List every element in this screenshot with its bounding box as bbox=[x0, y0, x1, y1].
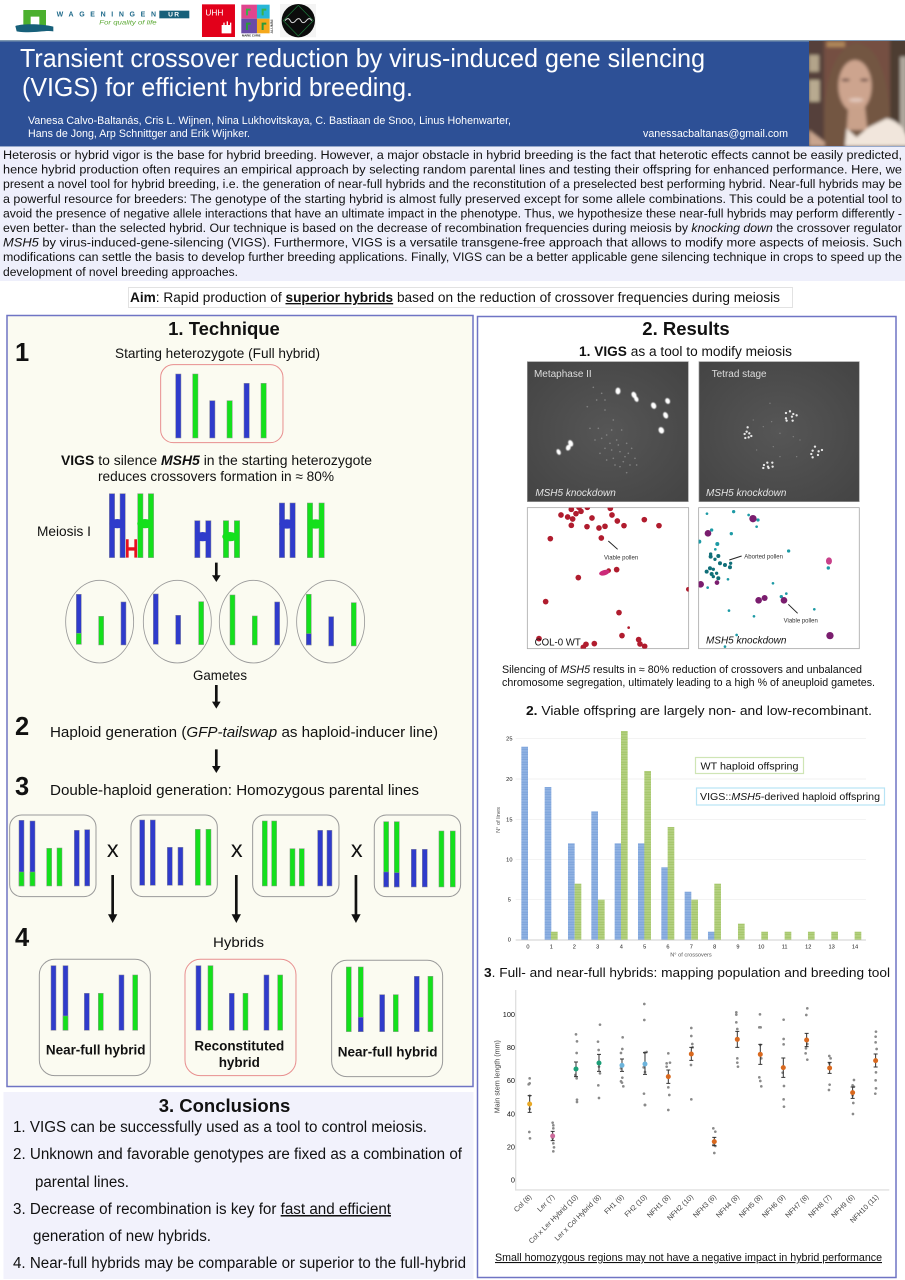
cross symbols: x bbox=[107, 836, 119, 862]
panel: conclusions bbox=[4, 1092, 474, 1279]
legend: WT haploid offspring: WT haploid offspring bbox=[700, 760, 799, 772]
abstract: even better- than the selected hybrid. Our technique is based on the decrease of recombination frequencies during meiosis by knocking down the crossover regulator bbox=[3, 221, 902, 235]
y axis labels: 60 bbox=[507, 1076, 515, 1085]
silencing caption: Silencing of MSH5 results in ≈ 80% reduction of crossovers and unbalanced bbox=[502, 664, 862, 676]
bar chart: crossovers: 1 bbox=[550, 944, 553, 950]
abstract: present a novel tool for hybrid breeding, i.e. the generation of near-full hybrids and the reconstitution of a preselected best performing hybrid. Near-full hybrids may be bbox=[3, 177, 902, 191]
bar chart: crossovers: 10 bbox=[506, 857, 512, 863]
bar chart: crossovers: N° of crossovers bbox=[670, 953, 712, 959]
logo: Marie Curie Alumni bbox=[241, 5, 274, 37]
logo: UHH: UHH bbox=[205, 7, 223, 17]
micrograph: MSH5 knockdown pollen bbox=[697, 508, 859, 649]
starting heterozygote label: Starting heterozygote (Full hybrid) bbox=[115, 346, 320, 361]
micrograph: COL-0 WT pollen: COL-0 WT bbox=[535, 637, 581, 648]
scatter chart: main stem length: Main stem length (mm) bbox=[493, 1040, 501, 1113]
conclusions list: generation of new hybrids. bbox=[33, 1228, 211, 1245]
VIGS description bbox=[61, 453, 372, 484]
title bbox=[20, 43, 705, 102]
y axis labels bbox=[503, 1010, 515, 1184]
homozygous parental lines bbox=[10, 815, 461, 897]
header banner bbox=[0, 37, 905, 150]
bar chart: crossovers bbox=[496, 731, 866, 959]
logo: Wageningen UR: WAGENINGEN bbox=[57, 12, 156, 19]
logo: Wageningen UR: For quality of life bbox=[99, 20, 157, 27]
bar chart: crossovers: 25 bbox=[506, 737, 512, 743]
x axis labels: FH2 (10) bbox=[623, 1193, 649, 1219]
bar chart: crossovers: 0 bbox=[508, 938, 511, 944]
x axis labels: Col (8) bbox=[513, 1193, 533, 1214]
logo: Marie Curie Alumni: ALUMNI bbox=[270, 20, 274, 33]
bar chart: crossovers: 6 bbox=[666, 944, 670, 950]
abstract: a powerful resource for breeders: The genotype of the starting hybrid is almost fully preserved except for some allele combinations. This could be a potential tool to bbox=[3, 192, 902, 206]
x axis labels: NFH7 (8) bbox=[784, 1193, 810, 1220]
bar chart: crossovers: 14 bbox=[852, 944, 858, 950]
logo: UHH bbox=[202, 4, 235, 37]
conclusions list: 4. Near-full hybrids may be comparable or superior to the full-hybrid bbox=[13, 1255, 466, 1272]
hybrid: near-full right bbox=[332, 960, 443, 1077]
x axis labels: Col x Ler Hybrid (10) bbox=[527, 1193, 580, 1245]
abstract: hence hybrid production often requires an empirical approach by selecting random parental lines and testing their offspring for enhanced performance. Here, we bbox=[3, 163, 902, 177]
bar chart: crossovers: 13 bbox=[828, 944, 835, 950]
logo: round emblem bbox=[280, 4, 316, 37]
y axis labels: 0 bbox=[511, 1175, 515, 1184]
micrograph: tetrad stage bbox=[699, 362, 859, 502]
micrograph: metaphase II: MSH5 knockdown bbox=[535, 488, 616, 499]
VIGS description: VIGS to silence MSH5 in the starting heterozygote bbox=[61, 453, 372, 468]
logo: Wageningen UR bbox=[15, 10, 189, 32]
abstract: MSH5 by virus-induced-gene-silencing (VIGS). Furthermore, VIGS is a versatile transgene-free approach that allows to modify more aspects of meiosis. Such bbox=[3, 236, 902, 250]
hybrid: near-full left bbox=[39, 959, 150, 1076]
panel: technique bbox=[7, 316, 473, 1086]
hybrid: near-full left: Near-full hybrid bbox=[46, 1043, 145, 1058]
subheading: mapping population: 3. Full- and near-full hybrids: mapping population and breeding tool bbox=[484, 965, 890, 980]
full hybrid chromosomes bbox=[161, 365, 283, 443]
legend: WT haploid offspring bbox=[696, 758, 804, 774]
bar chart: crossovers: 12 bbox=[805, 944, 811, 950]
arrow: meiosis to gametes bbox=[212, 563, 221, 582]
micrograph: metaphase II bbox=[527, 362, 688, 502]
conclusions list bbox=[13, 1119, 466, 1272]
double haploid text: Double-haploid generation: Homozygous parental lines bbox=[50, 782, 419, 799]
bar chart: crossovers: 20 bbox=[506, 777, 512, 783]
VIGS description: reduces crossovers formation in ≈ 80% bbox=[98, 469, 334, 484]
cross symbols bbox=[107, 836, 363, 862]
abstract bbox=[0, 147, 905, 281]
x axis labels: NFH2 (10) bbox=[666, 1193, 695, 1222]
silencing caption: chromosome segregation, ultimately leading to a high % of aneuploid gametes. bbox=[502, 677, 875, 689]
bar chart: crossovers: 5 bbox=[508, 898, 511, 904]
x axis labels: NFH10 (11) bbox=[849, 1193, 880, 1225]
step number 1: 1 bbox=[15, 339, 29, 367]
cross symbols: x bbox=[351, 836, 363, 862]
conclusions list: parental lines. bbox=[35, 1174, 129, 1191]
x axis labels: NFH5 (8) bbox=[738, 1193, 764, 1220]
authors: Hans de Jong, Arp Schnittger and Erik Wijnker. bbox=[28, 128, 250, 140]
conclusions list: 3. Decrease of recombination is key for fast and efficient bbox=[13, 1201, 392, 1218]
group means bbox=[527, 1037, 878, 1144]
logo: Marie Curie Alumni: MARIE CURIE bbox=[242, 33, 261, 37]
hybrid: reconstituted bbox=[185, 959, 296, 1076]
logo: Wageningen UR: UR bbox=[168, 12, 180, 19]
hybrid: near-full right: Near-full hybrid bbox=[338, 1044, 437, 1059]
micrograph: MSH5 knockdown pollen: Aborted pollen bbox=[744, 555, 783, 561]
x axis labels: NFH8 (7) bbox=[807, 1193, 833, 1220]
x axis labels: NFH9 (6) bbox=[830, 1193, 856, 1220]
conclusions list: 1. VIGS can be successfully used as a tool to control meiosis. bbox=[13, 1119, 427, 1136]
x axis labels: FH1 (9) bbox=[603, 1193, 626, 1216]
hybrid: reconstituted: Reconstituted bbox=[194, 1039, 284, 1054]
y axis labels: 100 bbox=[503, 1010, 515, 1019]
arrow: gametes to haploid bbox=[212, 685, 221, 709]
cross symbols: x bbox=[231, 836, 243, 862]
micrograph: MSH5 knockdown pollen: MSH5 knockdown bbox=[706, 635, 787, 646]
logos row bbox=[15, 4, 316, 37]
step number 2: 2 bbox=[15, 713, 29, 741]
raw data points bbox=[527, 1003, 878, 1154]
bar chart: crossovers: 11 bbox=[782, 944, 788, 950]
bar chart: crossovers: 7 bbox=[690, 944, 693, 950]
haploid generation text: Haploid generation (GFP-tailswap as haploid-inducer line) bbox=[50, 724, 438, 741]
bar chart: crossovers: 4 bbox=[620, 944, 623, 950]
abstract: avoid the presence of negative allele interactions that have an ultimate impact in the phenotype. Thus, we hypothesize these near-full hybrids may perform differently - bbox=[3, 206, 902, 220]
hybrids label: Hybrids bbox=[213, 935, 264, 950]
x axis labels bbox=[513, 1193, 880, 1245]
y axis labels: 40 bbox=[507, 1109, 515, 1118]
x axis labels: Ler (7) bbox=[536, 1193, 556, 1214]
bar chart: crossovers: 9 bbox=[736, 944, 740, 950]
bar chart: crossovers: 10 bbox=[758, 944, 764, 950]
arrow: haploid to double haploid bbox=[212, 749, 221, 773]
abstract: Heterosis or hybrid vigor is the base for hybrid breeding. However, a major obstacle in hybrid breeding is the fact that heterotic effects cannot be easily predicted, bbox=[3, 148, 902, 162]
bar chart: crossovers: 3 bbox=[596, 944, 599, 950]
bar chart: crossovers: 5 bbox=[643, 944, 646, 950]
legend: VIGS MSH5 offspring: VIGS::MSH5-derived haploid offspring bbox=[700, 791, 880, 803]
abstract: development of novel breeding approaches. bbox=[3, 265, 238, 279]
bar chart: crossovers: 15 bbox=[506, 817, 512, 823]
y axis labels: 20 bbox=[507, 1142, 515, 1151]
x axis labels: NFH1 (8) bbox=[646, 1193, 672, 1220]
subheading: VIGS tool: 1. VIGS as a tool to modify meiosis bbox=[579, 344, 792, 359]
y axis labels: 80 bbox=[507, 1043, 515, 1052]
micrograph: tetrad stage: MSH5 knockdown bbox=[706, 488, 787, 499]
chart takeaway: Small homozygous regions may not have a negative impact in hybrid performance bbox=[495, 1252, 882, 1264]
x axis labels: NFH3 (6) bbox=[692, 1193, 718, 1220]
meiosis label: Meiosis I bbox=[37, 524, 91, 539]
author photo bbox=[809, 41, 905, 146]
x axis labels: NFH4 (8) bbox=[715, 1193, 741, 1220]
bar chart: crossovers: 0 bbox=[526, 944, 530, 950]
title: Transient crossover reduction by virus-induced gene silencing bbox=[20, 43, 705, 73]
contact email: vanessacbaltanas@gmail.com bbox=[643, 128, 788, 140]
abstract: modifications can settle the basis to develop further breeding applications. Finally, VIGS can be a better applicable gene silencing technique in crops to speed up the bbox=[3, 250, 902, 264]
micrograph: COL-0 WT pollen: Viable pollen bbox=[604, 555, 638, 561]
error bars bbox=[528, 1031, 878, 1146]
aim box: Aim: Rapid production of superior hybrids based on the reduction of crossover frequencies during meiosis bbox=[130, 290, 780, 305]
scatter chart: main stem length bbox=[493, 990, 889, 1245]
title: (VIGS) for efficient hybrid breeding. bbox=[22, 72, 413, 102]
gamete cells bbox=[66, 580, 365, 663]
x axis labels: Ler x Col Hybrid (8) bbox=[553, 1193, 603, 1243]
bars: WT offspring bbox=[551, 731, 861, 940]
meiosis I chromosomes bbox=[109, 494, 324, 558]
micrograph: tetrad stage: Tetrad stage bbox=[712, 369, 767, 380]
panel: results bbox=[478, 316, 896, 1278]
silencing caption bbox=[502, 664, 875, 689]
legend: VIGS MSH5 offspring bbox=[696, 788, 884, 805]
subheading: viable offspring: 2. Viable offspring are largely non- and low-recombinant. bbox=[526, 703, 872, 718]
authors: Vanesa Calvo-Baltanás, Cris L. Wijnen, Nina Lukhovitskaya, C. Bastiaan de Snoo, Linus Hohenwarter, bbox=[28, 115, 511, 127]
authors bbox=[28, 115, 511, 140]
step number 3: 3 bbox=[15, 773, 29, 801]
heading: conclusions: 3. Conclusions bbox=[159, 1095, 290, 1116]
micrograph: COL-0 WT pollen bbox=[527, 504, 691, 650]
bar chart: crossovers: 8 bbox=[713, 944, 716, 950]
heading: results: 2. Results bbox=[642, 318, 730, 339]
arrows: crosses to hybrids bbox=[108, 875, 361, 923]
hybrid: reconstituted: hybrid bbox=[219, 1055, 260, 1070]
bar chart: crossovers: 2 bbox=[573, 944, 576, 950]
conclusions list: 2. Unknown and favorable genotypes are fixed as a combination of bbox=[13, 1146, 463, 1163]
bars: VIGS-derived offspring bbox=[521, 747, 715, 940]
heading: technique: 1. Technique bbox=[168, 318, 280, 339]
step number 4: 4 bbox=[15, 924, 30, 952]
gametes label: Gametes bbox=[193, 668, 247, 683]
bar chart: crossovers: N° of lines bbox=[496, 807, 502, 833]
micrograph: metaphase II: Metaphase II bbox=[534, 369, 592, 380]
micrograph: MSH5 knockdown pollen: Viable pollen bbox=[784, 619, 818, 625]
x axis labels: NFH6 (9) bbox=[761, 1193, 787, 1220]
